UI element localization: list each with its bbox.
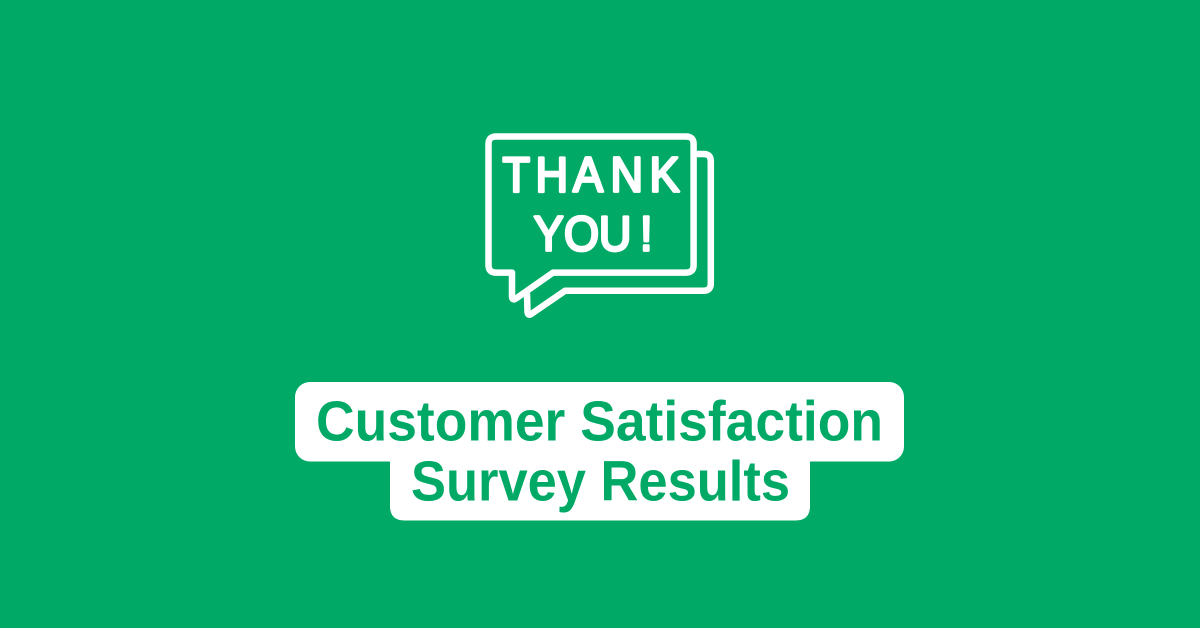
back speech bubble [527,154,711,315]
title background: second line [390,450,810,520]
title line two: Survey Results [411,450,790,514]
title block [295,382,904,520]
front speech bubble [488,136,694,299]
bubble text: you: YOU! [534,206,653,261]
bubble text: thank: THANK [503,147,680,202]
title line one: Customer Satisfaction [316,390,883,454]
title background: first line [295,382,904,462]
icon: thank you speech bubbles [488,136,711,315]
